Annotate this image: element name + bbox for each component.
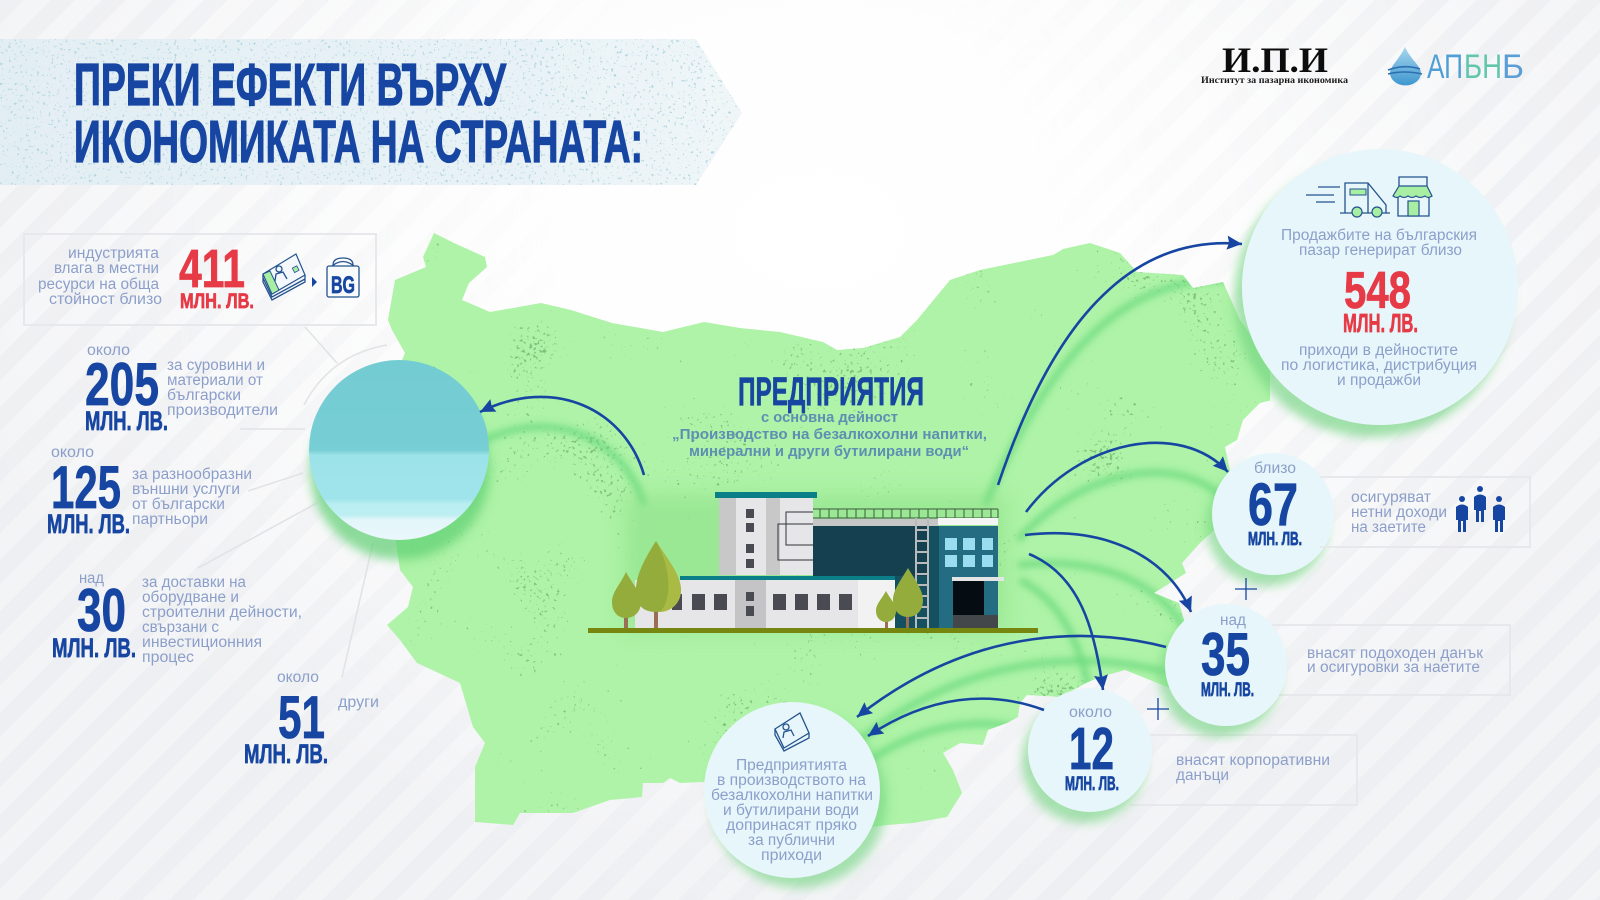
heading: enterprises: минерални и други бутилирани води“ <box>689 443 969 460</box>
circle: income tax <box>1165 604 1287 726</box>
circle: corporate tax <box>1028 688 1152 812</box>
stat: 125: за разнообразни <box>132 466 252 483</box>
number: 548: МЛН. ЛВ. <box>1343 308 1418 338</box>
logo: IPI: Институт за пазарна икономика <box>1201 76 1348 86</box>
teal block <box>928 518 1004 628</box>
stat: 12 <box>1065 704 1330 795</box>
stat: 67: МЛН. ЛВ. <box>1248 529 1302 549</box>
stat: 125: МЛН. ЛВ. <box>47 509 130 539</box>
circle: sales <box>1242 149 1518 425</box>
stat: 30: над <box>79 570 104 587</box>
stat: 35: МЛН. ЛВ. <box>1201 680 1254 701</box>
icon: people <box>1456 486 1505 532</box>
stat: 51: други <box>338 694 379 711</box>
title: ПРЕКИ ЕФЕКТИ ВЪРХУ <box>74 52 507 118</box>
stat: 205: материали от <box>167 372 263 389</box>
number: 548 <box>1343 262 1418 338</box>
panel: local resources box <box>24 234 376 325</box>
text: sales circle <box>1281 177 1477 389</box>
text: sales circle: по логистика, дистрибуция <box>1281 357 1477 374</box>
stat: 67: нетни доходи <box>1351 504 1447 521</box>
icon: BG bag <box>327 258 359 299</box>
stat: 67: 67 <box>1248 471 1298 538</box>
text: public revenue circle: приходи <box>761 847 822 864</box>
icon: store <box>1393 177 1432 216</box>
stat: 12: около <box>1069 704 1112 721</box>
ladder <box>916 518 928 628</box>
title <box>74 52 643 175</box>
stat: 205 <box>85 342 278 436</box>
heading: enterprises: „Производство на безалкохолни напитки, <box>672 426 987 443</box>
stat: 30 <box>52 570 302 666</box>
low wing <box>635 576 928 628</box>
text: public revenue circle: допринасят пряко <box>726 817 857 834</box>
icon: plus <box>1235 578 1257 600</box>
stat: 30: за доставки на <box>142 574 246 591</box>
ground <box>588 628 1038 633</box>
logo: APBNB: Б <box>1502 48 1524 86</box>
number: 548: 548 <box>1344 262 1411 320</box>
stat: 12: внасят корпоративни <box>1176 752 1330 769</box>
stat: 35: 35 <box>1201 621 1250 688</box>
logo: IPI: И.П.И <box>1222 40 1328 80</box>
stat: 12: 12 <box>1069 716 1114 782</box>
text: resources: ресурси на обща <box>38 276 159 293</box>
icon: plus <box>1147 698 1169 720</box>
stat: 30: строителни дейности, <box>142 604 302 621</box>
stat: 51: МЛН. ЛВ. <box>244 739 328 769</box>
icon: banknotes <box>775 713 809 751</box>
stat: 67: близо <box>1254 460 1296 477</box>
stat: 30: свързани с <box>142 619 219 636</box>
stat: 30: оборудване и <box>142 589 239 606</box>
text: resources: индустрията <box>68 245 159 262</box>
tower <box>715 492 817 575</box>
stat: 51: около <box>277 669 319 686</box>
heading: enterprises <box>672 370 987 460</box>
text: resources: стойност близо <box>49 291 162 308</box>
box: corporate tax <box>1130 735 1357 805</box>
stat: 205: 205 <box>85 351 159 418</box>
stat: 125: от български <box>132 496 225 513</box>
logo: IPI <box>1201 40 1348 86</box>
dark hall <box>813 509 998 576</box>
stat: 67: осигуряват <box>1351 489 1431 506</box>
circle: public revenue <box>704 702 880 878</box>
text: sales circle: и продажби <box>1337 372 1421 389</box>
icon: BG bag: BG <box>331 272 355 299</box>
text: sales circle: пазар генерират близо <box>1299 242 1462 259</box>
arrow glows on map <box>480 279 1240 761</box>
stat: 51: 51 <box>278 684 325 751</box>
stat: 67 <box>1248 460 1447 549</box>
box: income tax <box>1272 625 1510 695</box>
stat: 125: външни услуги <box>132 481 240 498</box>
text: public revenue circle <box>711 713 873 864</box>
stat: 125: 125 <box>51 454 121 521</box>
arrows <box>480 243 1242 736</box>
heading: enterprises: ПРЕДПРИЯТИЯ <box>738 370 924 414</box>
text: public revenue circle: в производството на <box>717 772 866 789</box>
logo: APBNB: БН <box>1464 48 1502 86</box>
title: ИКОНОМИКАТА НА СТРАНАТА: <box>74 109 643 175</box>
stat: 12: данъци <box>1176 767 1229 784</box>
stat: 205: около <box>87 342 130 359</box>
text: public revenue circle: за публични <box>748 832 835 849</box>
text: resources: влага в местни <box>54 260 159 277</box>
heading: enterprises: с основна дейност <box>761 409 898 426</box>
stat: 35 <box>1201 612 1483 701</box>
stat: 205: български <box>167 387 241 404</box>
stat: 125: партньори <box>132 511 208 528</box>
stat: 205: за суровини и <box>167 357 265 374</box>
icon: banknotes <box>263 254 305 300</box>
building illustration <box>588 492 1038 633</box>
stat: 205: производители <box>167 402 278 419</box>
stat: 125 <box>47 444 252 539</box>
text: public revenue circle: и бутилирани води <box>723 802 859 819</box>
text: resources <box>38 245 162 308</box>
stat: 67: на заетите <box>1351 519 1426 536</box>
connector lines <box>198 327 387 677</box>
stat: 35: над <box>1220 612 1246 629</box>
chart: spending circle <box>309 360 489 540</box>
stat: 30: МЛН. ЛВ. <box>52 633 136 663</box>
stat: 51 <box>244 669 379 769</box>
logo: APBNB <box>1388 47 1524 86</box>
map of Bulgaria <box>370 220 1270 840</box>
trees <box>612 541 923 628</box>
stat: 12: МЛН. ЛВ. <box>1065 774 1119 795</box>
number: 411: МЛН. ЛВ. <box>180 290 254 313</box>
stat: 30: инвестиционния <box>142 634 262 651</box>
text: sales circle: Продажбите на българския <box>1281 227 1477 244</box>
box: net income <box>1320 477 1530 547</box>
logo: APBNB: АП <box>1427 48 1463 86</box>
title banner <box>0 39 742 185</box>
stat: 125: около <box>51 444 94 461</box>
icon: delivery truck <box>1306 183 1390 217</box>
building halo <box>625 495 1005 630</box>
stat: 35: внасят подоходен данък <box>1307 645 1483 662</box>
stat: 35: и осигуровки за наетите <box>1307 659 1480 676</box>
stat: 205: МЛН. ЛВ. <box>85 406 168 436</box>
arrow: small triangle <box>312 277 317 287</box>
circle: net income <box>1212 453 1334 575</box>
number: 411: 411 <box>179 239 245 299</box>
stat: 30: 30 <box>77 577 126 644</box>
stat: 30: процес <box>142 649 194 666</box>
text: public revenue circle: Предприятията <box>736 757 847 774</box>
text: public revenue circle: безалкохолни напитки <box>711 787 873 804</box>
text: sales circle: приходи в дейностите <box>1299 342 1458 359</box>
